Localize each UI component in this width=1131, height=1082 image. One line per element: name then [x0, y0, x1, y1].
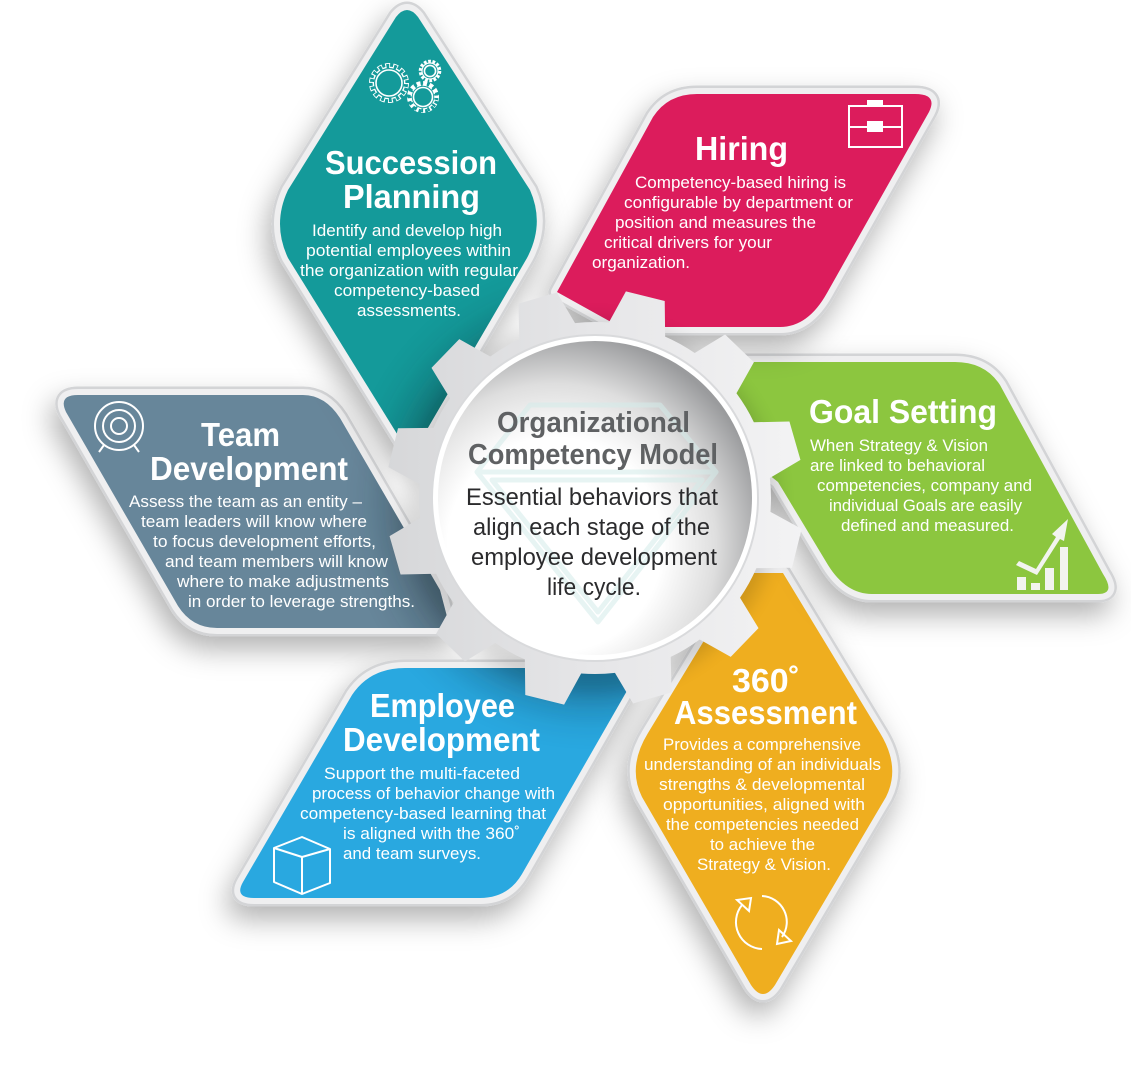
- text: team development body: and team members will know: [165, 553, 388, 571]
- text: team development body: in order to leverage strengths.: [188, 593, 415, 611]
- heading: team development: Development: [150, 450, 348, 487]
- heading: team development: Team: [201, 416, 280, 453]
- text: employee development body: competency-based learning that: [300, 805, 546, 823]
- heading: 360 assessment: [674, 662, 857, 731]
- heading: succession planning: Succession: [325, 144, 497, 181]
- panel: goal setting: [700, 362, 1108, 594]
- heading: team development: [150, 416, 348, 487]
- text: succession planning body: the organization with regular: [300, 262, 519, 280]
- icon: briefcase: [849, 100, 902, 147]
- text: center description: life cycle.: [547, 574, 641, 601]
- heading: succession planning: Planning: [343, 178, 480, 215]
- text: goal setting body: [810, 437, 1032, 535]
- icon: growth chart: [1016, 519, 1068, 590]
- text: employee development body: [300, 765, 555, 863]
- text: 360 assessment body: Provides a comprehensive: [663, 736, 861, 754]
- text: team development body: to focus development efforts,: [153, 533, 376, 551]
- text: hiring body: position and measures the: [615, 214, 816, 232]
- icon: diamond watermark: [477, 405, 716, 622]
- text: succession planning body: potential employees within: [306, 242, 511, 260]
- text: employee development body: and team surveys.: [343, 845, 481, 863]
- panel: employee development: [240, 668, 640, 898]
- heading: employee development: Development: [343, 721, 540, 758]
- panel: 360 assessment: [636, 573, 892, 994]
- text: center description: [466, 484, 718, 601]
- text: center description: Essential behaviors that: [466, 484, 718, 511]
- panel: team development: [64, 395, 450, 628]
- text: goal setting body: When Strategy & Vision: [810, 437, 988, 455]
- text: hiring body: configurable by department or: [624, 194, 854, 212]
- text: team development body: team leaders will know where: [141, 513, 367, 531]
- central gear: [388, 291, 801, 705]
- text: team development body: where to make adjustments: [176, 573, 389, 591]
- heading: organizational competency model: [468, 407, 718, 471]
- heading: 360 assessment: 360˚: [732, 662, 800, 699]
- icon: cycle arrows: [736, 896, 791, 949]
- heading: hiring: Hiring: [695, 130, 788, 167]
- text: succession planning body: competency-based: [334, 282, 480, 300]
- heading: employee development: Employee: [370, 687, 515, 724]
- text: employee development body: is aligned with the 360˚: [343, 825, 520, 843]
- icon: gears: [371, 61, 440, 111]
- icon: target: [95, 402, 143, 452]
- panel: hiring: [557, 94, 932, 327]
- text: hiring body: Competency-based hiring is: [635, 174, 846, 192]
- heading: goal setting: Goal Setting: [809, 393, 997, 430]
- icon: cube: [274, 837, 330, 894]
- text: team development body: Assess the team as an entity –: [129, 493, 363, 511]
- heading: organizational competency model: Competency Model: [468, 439, 718, 471]
- text: 360 assessment body: opportunities, aligned with: [663, 796, 865, 814]
- heading: 360 assessment: Assessment: [674, 694, 857, 731]
- text: 360 assessment body: [644, 736, 881, 874]
- text: 360 assessment body: understanding of an individuals: [644, 756, 881, 774]
- text: 360 assessment body: strengths & developmental: [659, 776, 865, 794]
- heading: succession planning: [325, 144, 497, 215]
- text: succession planning body: [300, 222, 519, 320]
- text: employee development body: Support the multi-faceted: [324, 765, 520, 783]
- text: hiring body: organization.: [592, 254, 690, 272]
- text: employee development body: process of behavior change with: [312, 785, 555, 803]
- text: goal setting body: individual Goals are easily: [829, 497, 1023, 515]
- text: goal setting body: are linked to behavioral: [810, 457, 985, 475]
- text: center description: employee development: [471, 544, 717, 571]
- text: goal setting body: defined and measured.: [841, 517, 1014, 535]
- text: 360 assessment body: to achieve the: [710, 836, 815, 854]
- panel: succession planning: [280, 10, 537, 450]
- text: hiring body: [592, 174, 854, 272]
- text: center description: align each stage of the: [473, 514, 710, 541]
- text: succession planning body: assessments.: [357, 302, 461, 320]
- heading: organizational competency model: Organizational: [497, 407, 690, 439]
- heading: employee development: [343, 687, 540, 758]
- text: 360 assessment body: Strategy & Vision.: [697, 856, 831, 874]
- text: hiring body: critical drivers for your: [604, 234, 773, 252]
- text: succession planning body: Identify and develop high: [312, 222, 502, 240]
- text: team development body: [129, 493, 415, 611]
- text: goal setting body: competencies, company and: [817, 477, 1032, 495]
- text: 360 assessment body: the competencies needed: [666, 816, 859, 834]
